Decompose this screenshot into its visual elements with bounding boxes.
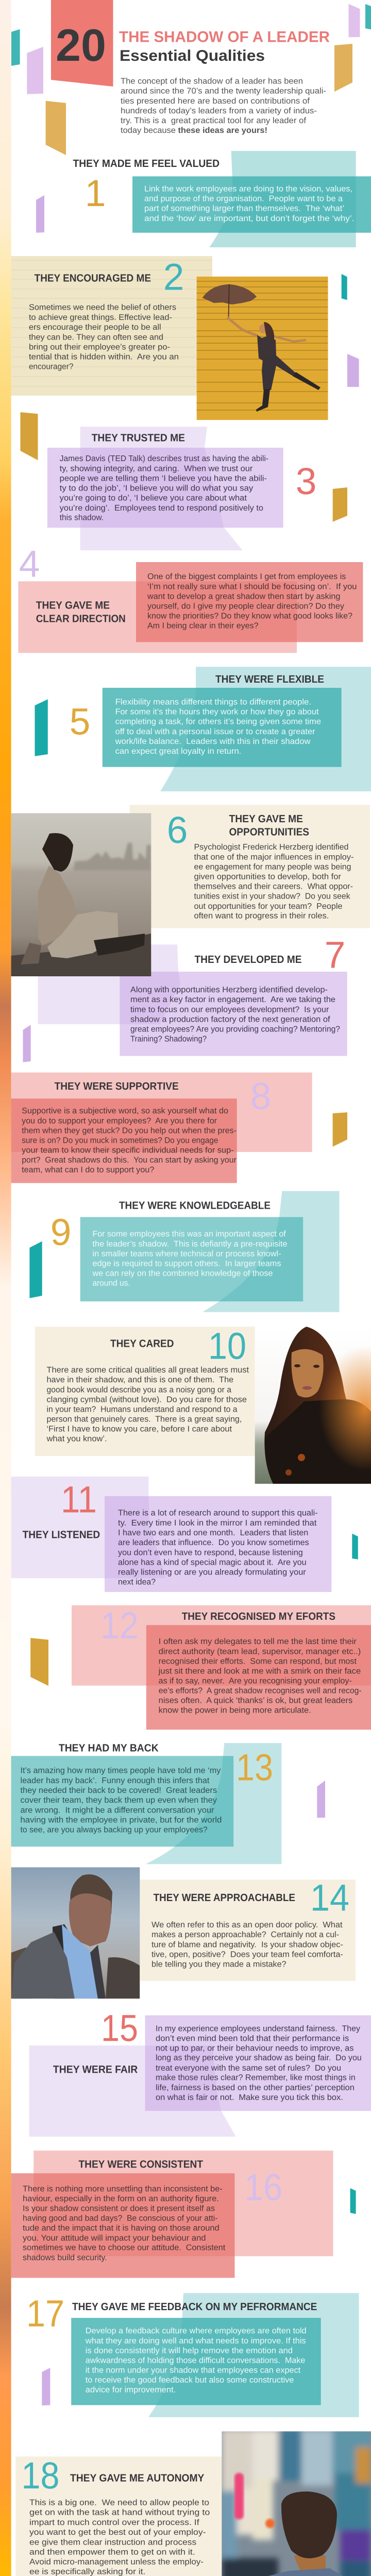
number 7: 7 <box>325 934 345 976</box>
body text: are wrong. It might be a different conversation your <box>21 1806 214 1815</box>
body text: to receive the good feedback but also some constructive <box>86 2376 294 2385</box>
body text: edge is required to support others. In larger teams <box>93 1260 281 1268</box>
body text: ble telling you they made a mistake? <box>151 1960 286 1969</box>
panel 11: they listened <box>11 1477 358 1592</box>
body text: themselves and their careers. What oppor- <box>194 883 353 891</box>
number 10: 10 <box>208 1325 246 1367</box>
body text: having good and bad days? Be conscious of your atti- <box>23 2214 217 2223</box>
body text <box>21 1767 222 1835</box>
body text: alone has a kind of special magic about it. Are you <box>118 1558 307 1567</box>
heading: THEY RECOGNISED MY EFORTS <box>182 1611 335 1622</box>
body text: There are some critical qualities all great leaders must <box>46 1366 249 1375</box>
body text: Am I being clear in their eyes? <box>147 622 259 631</box>
heading <box>229 813 309 838</box>
heading: THEY MADE ME FEEL VALUED <box>73 158 220 170</box>
accent shape <box>29 1241 42 1298</box>
body text: know the power in being more articulate. <box>159 1706 311 1715</box>
body text: In my experience employees understand fairness. They <box>156 2024 360 2033</box>
body text: tential that is hidden within. Are you an <box>29 352 179 361</box>
body text: person that genuinely cares. There is a great saying, <box>46 1415 242 1424</box>
body text <box>22 1107 237 1175</box>
photo: man sitting by the sea <box>11 813 151 976</box>
body text: tude and the impact that it is having on those around <box>23 2224 220 2233</box>
body text: Along with opportunities Herzberg identified develop- <box>130 986 328 994</box>
body text: you don’t even have to respond, because listening <box>118 1548 303 1557</box>
number 12: 12 <box>100 1605 139 1647</box>
heading: THEY WERE APPROACHABLE <box>154 1892 295 1904</box>
accent shape <box>42 2368 50 2405</box>
body text: and then empower them to get on with it. <box>29 2548 195 2556</box>
intro paragraph: today because these ideas are yours! <box>121 126 267 135</box>
intro paragraph: ties presented here are based on contributions of <box>121 97 310 106</box>
body text <box>156 2024 362 2102</box>
photo: woman with long hair <box>255 1327 371 1484</box>
panel 3: they trusted me <box>47 427 347 550</box>
number 5: 5 <box>70 701 90 743</box>
body text: Sometimes we need the belief of others <box>29 303 176 312</box>
body text: cover their team, they back them up even when they <box>21 1796 217 1805</box>
number 13: 13 <box>236 1747 273 1789</box>
body text: life, fairness is based on the other parties’ perception <box>156 2083 355 2092</box>
body text: can expect great loyalty in return. <box>115 747 241 756</box>
body text: clanging cymbal (without love). Do you care for those <box>46 1395 247 1404</box>
body text: Supportive is a subjective word, so ask yourself what do <box>22 1107 228 1115</box>
heading: THEY CARED <box>110 1337 174 1349</box>
body text: to achieve great things. Effective lead- <box>29 313 172 322</box>
decorative header shapes <box>11 4 371 155</box>
heading: CLEAR DIRECTION <box>36 613 126 624</box>
body text: off to deal with a personal issue or to create a greater <box>115 727 315 736</box>
body text: around us. <box>93 1279 130 1288</box>
body text: ment as a key factor in engagement. Are we taking the <box>130 995 335 1004</box>
body text: them when they get stuck? Do you help out when the pres- <box>22 1126 237 1135</box>
accent shape <box>36 195 44 233</box>
heading: OPPORTUNITIES <box>229 826 309 838</box>
number 3: 3 <box>296 461 316 502</box>
body text: you want to get the best out of your employ- <box>29 2528 206 2537</box>
number 4: 4 <box>19 543 40 585</box>
body text <box>151 1921 343 1969</box>
body text: it the norm under your shadow that employees can expect <box>86 2366 301 2375</box>
body text <box>85 2327 307 2395</box>
body text: ‘First I have to know you care, before I care about <box>46 1425 232 1434</box>
number 9: 9 <box>50 1212 71 1253</box>
panel 14: they were approachable <box>140 1877 356 1981</box>
heading: THEY TRUSTED ME <box>92 432 185 444</box>
accent shape <box>317 1781 325 1818</box>
body text: having with the employee in private, but for the world <box>21 1816 222 1824</box>
heading: THEY WERE SUPPORTIVE <box>55 1080 179 1092</box>
body text: Psychologist Frederick Herzberg identified <box>194 843 348 852</box>
intro paragraph: try. This is a great practical tool for any leader of <box>121 116 307 125</box>
heading: THEY WERE KNOWLEDGEABLE <box>119 1200 271 1212</box>
body text <box>118 1509 318 1587</box>
body text: Training? Shadowing? <box>130 1035 207 1044</box>
body text: work/life balance. Leaders with this in their shadow <box>115 737 311 746</box>
body text: This is a big one. We need to allow people to <box>29 2499 209 2507</box>
body text: time to focus on our employees development? Is your <box>130 1005 329 1014</box>
body text: what they are doing well and what needs to improve. If this <box>85 2336 306 2345</box>
body text: awkwardness of holding those difficult conversations. Make <box>86 2357 305 2365</box>
body text: often want to progress in their roles. <box>194 912 329 921</box>
body text: what you know’. <box>46 1435 107 1444</box>
body text: makes a person approachable? Certainly not a cul- <box>151 1930 339 1939</box>
body text <box>144 185 355 223</box>
body text: good book would describe you as a noisy gong or a <box>46 1385 231 1394</box>
panel 7: they developed me <box>23 934 347 1062</box>
title: THE SHADOW OF A LEADER <box>119 29 330 45</box>
body text: you’re doing’. Employees tend to respond positively to <box>60 504 263 513</box>
body text: your team to know their specific individual needs for sup- <box>22 1146 234 1155</box>
body text: just sit there and look at me with a smirk on their face <box>158 1667 361 1676</box>
body text: you. Your attitude will impact your behaviour and <box>23 2234 206 2243</box>
heading: THEY GAVE ME FEEDBACK ON MY PEFRORMANCE <box>72 2301 317 2313</box>
intro paragraph: around since the 70’s and the twenty leadership quali- <box>121 87 326 96</box>
number 11: 11 <box>61 1479 97 1521</box>
body text: Flexibility means different things to different people. <box>115 698 311 706</box>
body text: in smaller teams where technical or process knowl- <box>93 1249 281 1258</box>
body text: We often refer to this as an open door policy. What <box>151 1921 343 1929</box>
body text: ee is specifically asking for it. <box>29 2567 145 2576</box>
red number block <box>51 0 113 87</box>
body text: in your team? Humans understand and respond to a <box>46 1405 238 1414</box>
body text <box>23 2184 226 2262</box>
panel 1: they made me feel valued <box>36 151 371 247</box>
body text: ty to do the job’, ‘I believe you will do what you say <box>60 484 253 493</box>
body text: ee’s efforts? A great shadow recognises well and recog- <box>159 1687 362 1696</box>
body text: don’t even mind been told that their performance is <box>156 2035 349 2043</box>
body text: bring out their employee’s greater po- <box>29 343 170 351</box>
body text: ee give them clear instruction and process <box>29 2538 196 2547</box>
body text: really listening or are you already formulating your <box>118 1568 306 1577</box>
body text: James Davis (TED Talk) describes trust as having the abili- <box>60 454 268 463</box>
body text: people we are telling them ‘I believe you have the abili- <box>60 474 267 483</box>
heading: THEY GAVE ME <box>229 813 303 825</box>
heading: THEY ENCOURAGED ME <box>35 273 151 284</box>
number 2: 2 <box>163 256 184 298</box>
number 18: 18 <box>22 2455 60 2497</box>
panel 9: they were knowledgeable <box>29 1191 339 1312</box>
body text: encourager? <box>29 363 73 371</box>
heading <box>36 600 126 624</box>
body text: is done consistently it will help remove the emotion and <box>86 2346 293 2355</box>
body text: sure is on? Do you muck in sometimes? Do you engage <box>22 1136 218 1145</box>
body text: sometimes we have to choose our attitude. Consistent <box>23 2244 226 2252</box>
body text: team, what can I do to support you? <box>22 1166 155 1175</box>
heading: THEY GAVE ME AUTONOMY <box>70 2472 205 2484</box>
body text: ‘I’m not really sure what I should be focusing on’. If you <box>147 582 357 591</box>
panel 12: they recognised my efforts <box>30 1605 371 1730</box>
body text: the leader’s shadow. This is defiantly a pre-requisite <box>93 1240 288 1248</box>
body text: For some employees this was an important aspect of <box>93 1230 286 1239</box>
body text: There is nothing more unsettling than inconsistent be- <box>23 2184 223 2193</box>
heading: THEY GAVE ME <box>36 600 110 612</box>
photo: man at the beach <box>11 1867 140 1999</box>
body text: port? Great shadows do this. You can start by asking your <box>22 1156 237 1165</box>
heading: THEY WERE FAIR <box>53 2063 138 2075</box>
panel 13: they had my back <box>11 1742 325 1864</box>
body text: haviour, especially in the form on an authority figure. <box>23 2194 219 2203</box>
body text: shadow a production factory of the next generation of <box>130 1015 330 1024</box>
body text: ty, showing integrity, and caring. When we trust our <box>60 464 253 473</box>
heading: THEY WERE FLEXIBLE <box>215 673 324 685</box>
body text: as if to say, never. Are you recognising your employ- <box>159 1677 352 1686</box>
body text: One of the biggest complaints I get from employees is <box>147 572 346 581</box>
body text: completing a task, for others it’s being given some time <box>115 718 321 726</box>
body text <box>194 843 353 921</box>
intro paragraph: hundreds of today’s leaders from a variety of indus- <box>121 107 317 115</box>
number 14: 14 <box>310 1877 349 1919</box>
body text: For some it’s the hours they work or how they go about <box>115 708 319 717</box>
body text: impart to much control over the process. If <box>29 2518 199 2527</box>
body text: ty. Every time I look in the mirror I am reminded that <box>118 1519 317 1528</box>
body text: that one of the major influences in employ- <box>194 853 353 861</box>
panel 8: they were supportive <box>11 1073 347 1183</box>
panel 4: they gave me clear direction <box>18 543 363 653</box>
body text: want to develop a great shadow then start by asking <box>147 592 340 601</box>
body text: leader has my back’. Funny enough this infers that <box>21 1776 210 1785</box>
body text: yourself, do I give my people clear direction? Do they <box>147 602 344 611</box>
intro paragraph <box>121 77 326 135</box>
body text: out opportunities for your team? People <box>194 902 343 911</box>
panel 17: they gave me feedback on my performance <box>26 2293 359 2417</box>
gradient strip on left edge <box>0 0 11 2576</box>
body text: next idea? <box>118 1578 156 1587</box>
panel 2: they encouraged me <box>11 256 328 420</box>
body text: to see, are you always backing up your employees? <box>21 1826 208 1835</box>
body text: shadows build security. <box>23 2253 107 2262</box>
panel 10: they cared <box>35 1325 255 1456</box>
panel 18: they gave me autonomy <box>15 2455 222 2576</box>
body text: ture of blame and negativity. Is your shadow objec- <box>151 1940 343 1949</box>
body text <box>115 698 321 756</box>
body text: There is a lot of research around to support this quali- <box>118 1509 318 1518</box>
body text: I have two ears and one month. Leaders that listen <box>118 1529 308 1537</box>
number 1: 1 <box>85 173 106 214</box>
body text: recognised their efforts. Some can respond, but most <box>159 1657 357 1666</box>
body text: we can rely on the combined knowledge of those <box>92 1269 273 1278</box>
body text: part of something larger than themselves. The ‘what’ <box>144 205 344 213</box>
body text: this shadow. <box>60 513 104 522</box>
body text: make those rules clear? Remember, like most things in <box>156 2074 356 2082</box>
panel 16: they were consistent <box>11 2150 356 2278</box>
body text: they can be. They can often see and <box>29 333 163 342</box>
body text: Is your shadow consistent or does it present itself as <box>23 2205 215 2213</box>
photo: man in a busy street <box>222 2429 371 2576</box>
body text <box>130 986 340 1044</box>
body text: long as they perceive your shadow as being fair. Do you <box>156 2054 362 2062</box>
subtitle: Essential Qualities <box>120 47 265 64</box>
body text: they needed their back to be covered! Great leaders <box>21 1786 217 1795</box>
accent shape <box>23 1025 31 1062</box>
body text <box>147 572 357 631</box>
panel 15: they were fair <box>29 2008 371 2137</box>
heading: THEY WERE CONSISTENT <box>78 2159 203 2171</box>
body text: you’re going to do’, ‘I believe you care about what <box>60 494 247 503</box>
body text: direct authority (team lead, supervisor, manager etc..) <box>159 1647 361 1656</box>
body text <box>46 1366 249 1444</box>
body text <box>29 303 179 371</box>
panel 6: they gave me opportunities <box>130 805 370 928</box>
body text: Avoid micro-management unless the employ- <box>29 2557 204 2566</box>
body text: It’s amazing how many times people have told me ‘my <box>21 1767 221 1775</box>
heading: THEY DEVELOPED ME <box>195 954 302 965</box>
body text: on what is fair or not. Make sure you tick this box. <box>156 2093 343 2102</box>
header section <box>51 0 330 135</box>
number 15: 15 <box>101 2008 138 2049</box>
body text: ee engagement for many people was being <box>194 862 351 871</box>
number 17: 17 <box>26 2293 64 2335</box>
number 16: 16 <box>244 2167 282 2209</box>
number 6: 6 <box>167 809 188 851</box>
body text: tive, open, positive? Does your team feel comforta- <box>151 1950 343 1959</box>
body text: you do to support your employees? Are you there for <box>22 1116 217 1125</box>
body text: Link the work employees are doing to the vision, values, <box>144 185 352 194</box>
accent shape <box>35 699 48 756</box>
accent shape <box>352 1534 358 1560</box>
panel 5: they were flexible <box>35 667 371 791</box>
body text: get on with the task at hand without trying to <box>29 2509 210 2517</box>
body text: given opportunities to develop, both for <box>194 872 342 881</box>
body text <box>92 1230 288 1288</box>
accent shape <box>350 2188 356 2214</box>
accent shape <box>333 487 347 522</box>
body text: and purpose of the organisation. People want to be a <box>144 195 343 204</box>
body text: treat everyone with the same set of rules? Do you <box>156 2064 341 2073</box>
number 8: 8 <box>250 1075 271 1117</box>
big number 20: 20 <box>56 20 106 71</box>
body text: know the priorities? Do they know what good looks like? <box>147 612 352 621</box>
body text: tunities exist in your shadow? Do you seek <box>194 892 351 901</box>
body text: and the ‘how’ are important, but don’t forget the ‘why’. <box>144 214 355 223</box>
body text: Develop a feedback culture where employees are often told <box>86 2327 307 2335</box>
body text <box>158 1637 362 1715</box>
heading: THEY HAD MY BACK <box>59 1742 159 1754</box>
body text: not up to par, or their behaviour needs to improve, as <box>156 2044 353 2053</box>
body text: nises often. A quick ‘thanks’ is ok, but great leaders <box>159 1697 352 1705</box>
body text <box>29 2499 210 2576</box>
body text: have in their shadow, and this is one of them. The <box>46 1376 233 1384</box>
body text: advice for improvement. <box>86 2386 176 2395</box>
body text: great employees? Are you providing coaching? Mentoring? <box>130 1025 340 1033</box>
accent shape <box>30 1638 48 1686</box>
body text: ers encourage their people to be all <box>29 323 161 332</box>
heading: THEY LISTENED <box>23 1529 100 1541</box>
intro paragraph: The concept of the shadow of a leader has been <box>121 77 303 86</box>
body text <box>60 454 268 522</box>
accent shape <box>333 1112 347 1147</box>
body text: I often ask my delegates to tell me the last time their <box>159 1637 357 1646</box>
photo: woman with umbrella on yellow wall <box>196 277 328 420</box>
decorative shapes beside panel 2 <box>21 274 359 460</box>
body text: are leaders that influence. Do you know sometimes <box>118 1538 309 1547</box>
